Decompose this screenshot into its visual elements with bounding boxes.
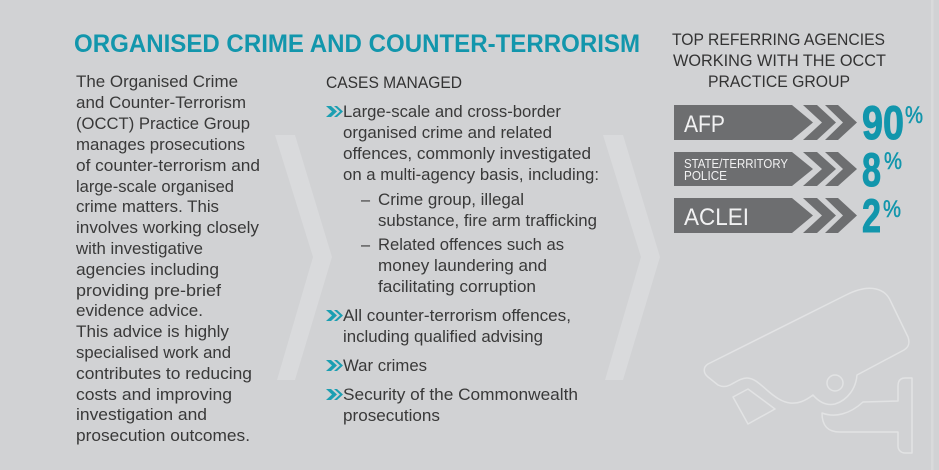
decorative chevron: right — [603, 135, 660, 380]
text block: practice group description: specialised work and — [76, 344, 231, 362]
list item: security prosecutions: prosecutions — [343, 407, 440, 425]
list item: war crimes: War crimes — [343, 357, 427, 375]
value: 2%: 2 — [862, 189, 881, 242]
arrow: ACLEI — [674, 198, 857, 233]
list item: security prosecutions — [343, 386, 578, 425]
label: State/Territory Police — [684, 157, 789, 183]
label: State/Territory Police: POLICE — [684, 169, 727, 183]
list item: security prosecutions: Security of the Commonwealth — [343, 386, 578, 404]
value: 90%: % — [905, 102, 923, 129]
list: cases managed — [326, 103, 599, 425]
label: AFP: AFP — [684, 111, 725, 138]
value: 2% — [862, 189, 901, 242]
icon: bullet chevrons 4 — [326, 389, 343, 400]
sub-item: crime group: substance, fire arm trafficking — [378, 212, 597, 230]
sub-item: related offences: Related offences such as — [378, 236, 564, 254]
list item: counter-terrorism offences — [343, 307, 571, 346]
heading: cases managed: CASES MANAGED — [326, 74, 462, 92]
list item: large-scale crime: on a multi-agency basis, including: — [343, 166, 599, 184]
text block: practice group description: with investigative — [75, 240, 203, 258]
stat row: AFP 90% — [674, 96, 923, 149]
list item: large-scale crime: Large-scale and cross-border — [343, 103, 562, 121]
value: 8%: % — [884, 148, 902, 175]
list item: large-scale crime — [343, 103, 599, 184]
list item: counter-terrorism offences: All counter-terrorism offences, — [343, 307, 571, 325]
list item: counter-terrorism offences: including qualified advising — [343, 328, 543, 346]
arrow: State/Territory Police — [674, 152, 857, 186]
icon: bullet chevrons 2 — [326, 310, 343, 321]
heading: top referring agencies: WORKING WITH THE OCCT — [673, 52, 886, 70]
text block: practice group description: of counter-terrorism and — [76, 157, 260, 175]
icon: bullet chevrons 3 — [326, 360, 343, 371]
text block: practice group description: prosecution outcomes. — [76, 427, 250, 445]
decorative chevron: left — [275, 135, 332, 380]
label: ACLEI: ACLEI — [684, 204, 749, 231]
text block: practice group description: involves working closely — [76, 219, 260, 237]
text block: practice group description: evidence advice. — [76, 302, 203, 320]
sub-item: related offences: facilitating corruption — [378, 278, 536, 296]
value: 8%: 8 — [862, 143, 881, 196]
sub-item: crime group: Crime group, illegal — [378, 191, 524, 209]
heading: top referring agencies — [672, 31, 886, 91]
arrow: AFP — [674, 105, 857, 140]
text block: practice group description: This advice is highly — [76, 323, 230, 341]
value: 2%: % — [883, 196, 901, 223]
text block: practice group description: investigation and — [76, 406, 207, 424]
value: 90%: 90 — [862, 96, 904, 149]
text block: practice group description: manages prosecutions — [76, 136, 245, 154]
stat row: ACLEI 2% — [674, 189, 901, 242]
icon: bullet chevrons 1 — [326, 106, 343, 117]
sub-item: related offences — [361, 236, 564, 296]
text block: practice group description: contributes to reducing — [76, 365, 252, 383]
list item: large-scale crime: organised crime and related — [343, 124, 552, 142]
title: ORGANISED CRIME AND COUNTER-TERRORISM — [74, 30, 640, 58]
list item: large-scale crime: offences, commonly investigated — [343, 145, 591, 163]
sub-item: crime group: – — [361, 191, 371, 209]
text block: practice group description: agencies including — [76, 261, 219, 279]
value: 8% — [862, 143, 902, 196]
text block: practice group description: providing pre-brief — [76, 282, 222, 300]
text block: practice group description: large-scale organised — [76, 178, 234, 196]
text block: practice group description: (OCCT) Practice Group — [76, 115, 250, 133]
sub-item: related offences: money laundering and — [378, 257, 547, 275]
text block: practice group description: crime matters. This — [76, 198, 219, 216]
sub-item: crime group — [361, 191, 597, 230]
text block: practice group description: and Counter-Terrorism — [76, 94, 246, 112]
heading: top referring agencies: PRACTICE GROUP — [708, 73, 850, 91]
text block: practice group description: The Organised Crime — [76, 73, 238, 91]
stat row: State/Territory Police 8% — [674, 143, 902, 196]
heading: top referring agencies: TOP REFERRING AGENCIES — [672, 31, 885, 49]
sub-item: related offences: – — [361, 236, 371, 254]
icon: security camera — [704, 288, 912, 453]
text block: practice group description: costs and improving — [76, 386, 232, 404]
label: State/Territory Police: STATE/TERRITORY — [684, 157, 789, 171]
text block: practice group description — [75, 73, 260, 445]
